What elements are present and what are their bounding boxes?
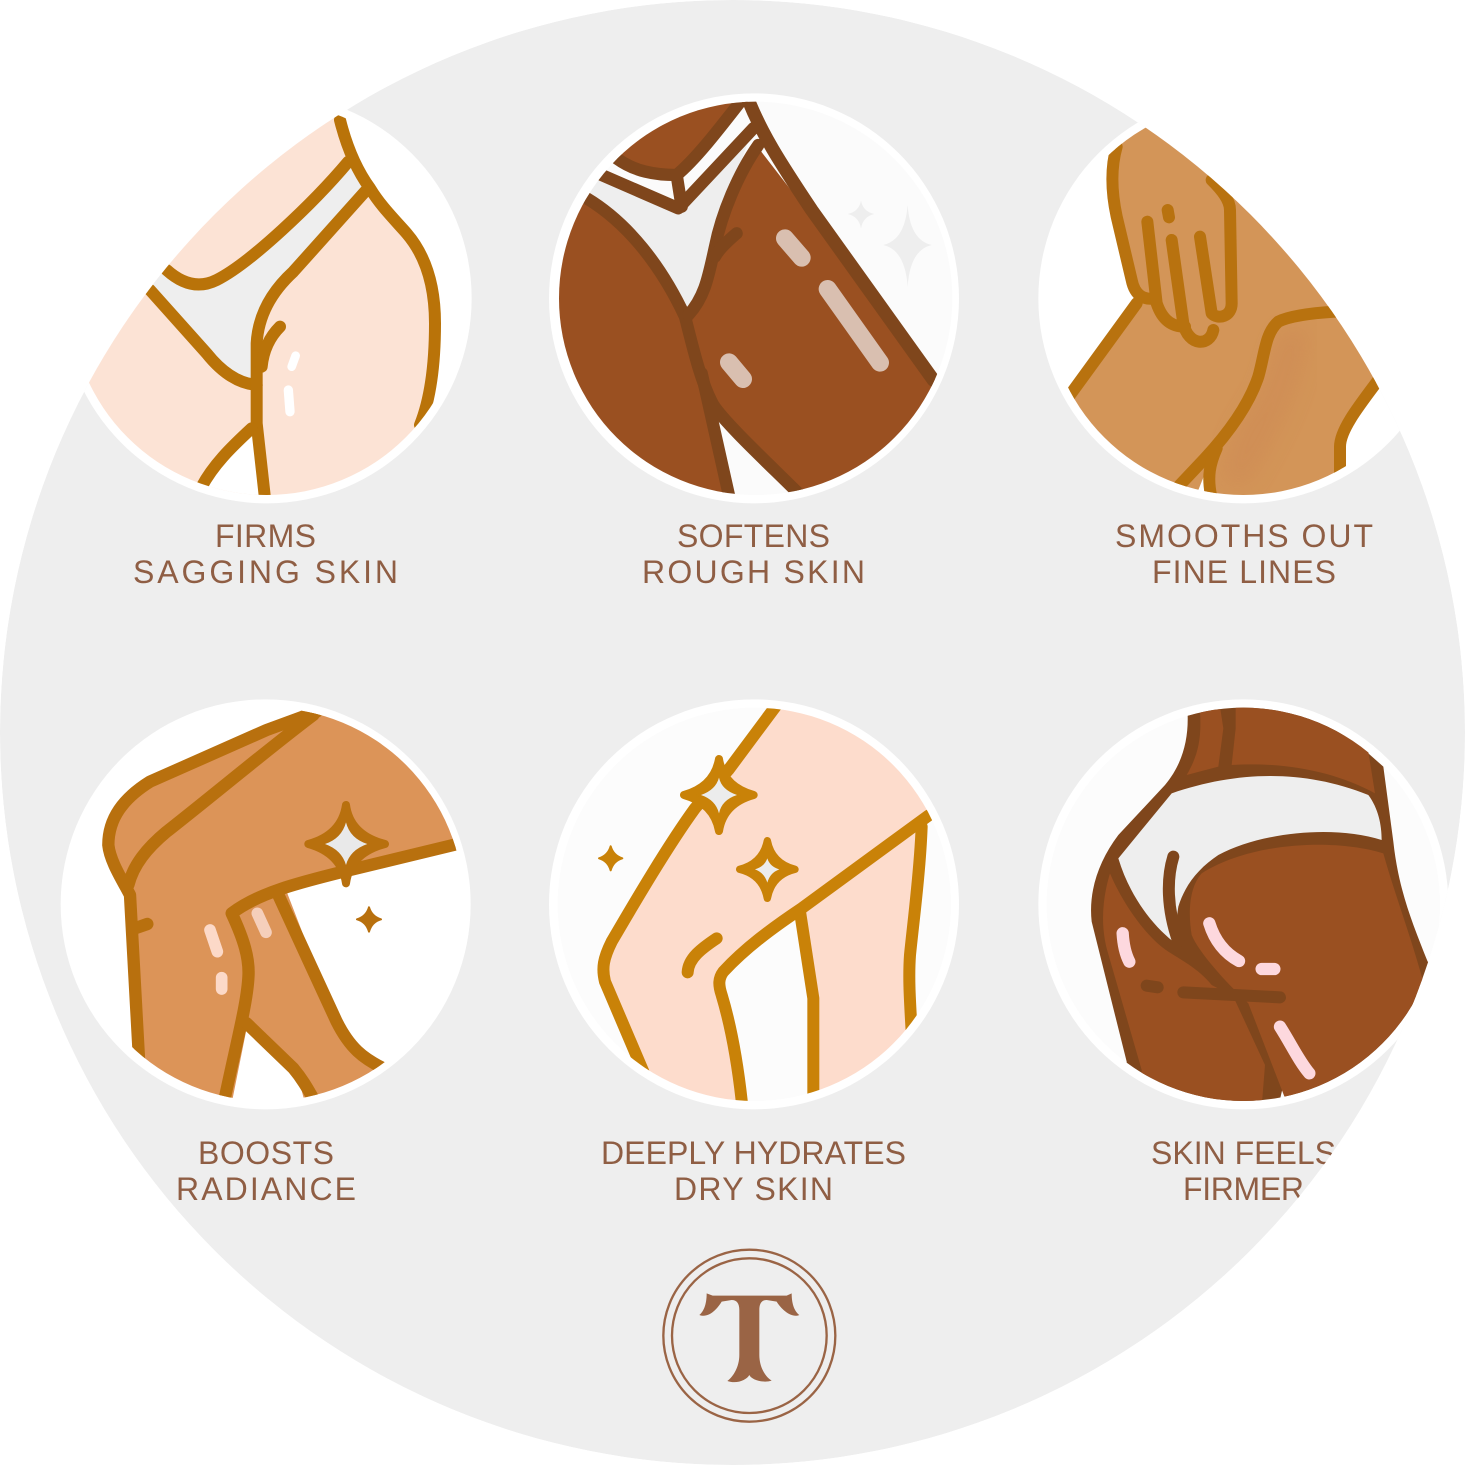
label: firms sagging skin: SAGGING SKIN (133, 554, 398, 590)
label: deeply hydrates dry skin: DEEPLY HYDRATES (601, 1135, 906, 1171)
label: skin feels firmer (1152, 1141, 1334, 1200)
label: boosts radiance (178, 1141, 355, 1200)
label: skin feels firmer: SKIN FEELS (1151, 1135, 1336, 1171)
label: smooths out fine lines: FINE LINES (1152, 554, 1336, 590)
label: boosts radiance: BOOSTS (198, 1135, 334, 1171)
icon: large sparkle (684, 759, 754, 831)
label: skin feels firmer: FIRMER (1183, 1171, 1304, 1207)
panel: smooths out fine lines (1038, 122, 1400, 504)
icon: medium sparkle (740, 841, 795, 898)
icon: sparkles (848, 201, 932, 287)
label: deeply hydrates dry skin: DRY SKIN (674, 1171, 833, 1207)
label: deeply hydrates dry skin (604, 1141, 904, 1200)
label: smooths out fine lines: SMOOTHS OUT (1115, 518, 1373, 554)
panel: boosts radiance (61, 699, 493, 1128)
icon: small sparkle (357, 907, 381, 932)
panel: skin feels firmer (1038, 699, 1465, 1128)
panel: softens rough skin (545, 93, 959, 523)
label: softens rough skin (644, 524, 862, 584)
label: firms sagging skin (134, 524, 396, 584)
icon: large sparkle (308, 805, 385, 883)
panel: firms sagging skin (84, 110, 472, 504)
label: softens rough skin: SOFTENS (677, 518, 830, 554)
label: softens rough skin: ROUGH SKIN (642, 554, 865, 590)
panel: deeply hydrates dry skin (549, 695, 978, 1128)
logo: T monogram (663, 1250, 835, 1422)
label: smooths out fine lines (1116, 524, 1372, 584)
icon: small sparkle (599, 846, 622, 870)
label: boosts radiance: RADIANCE (176, 1171, 356, 1207)
label: firms sagging skin: FIRMS (215, 518, 316, 554)
